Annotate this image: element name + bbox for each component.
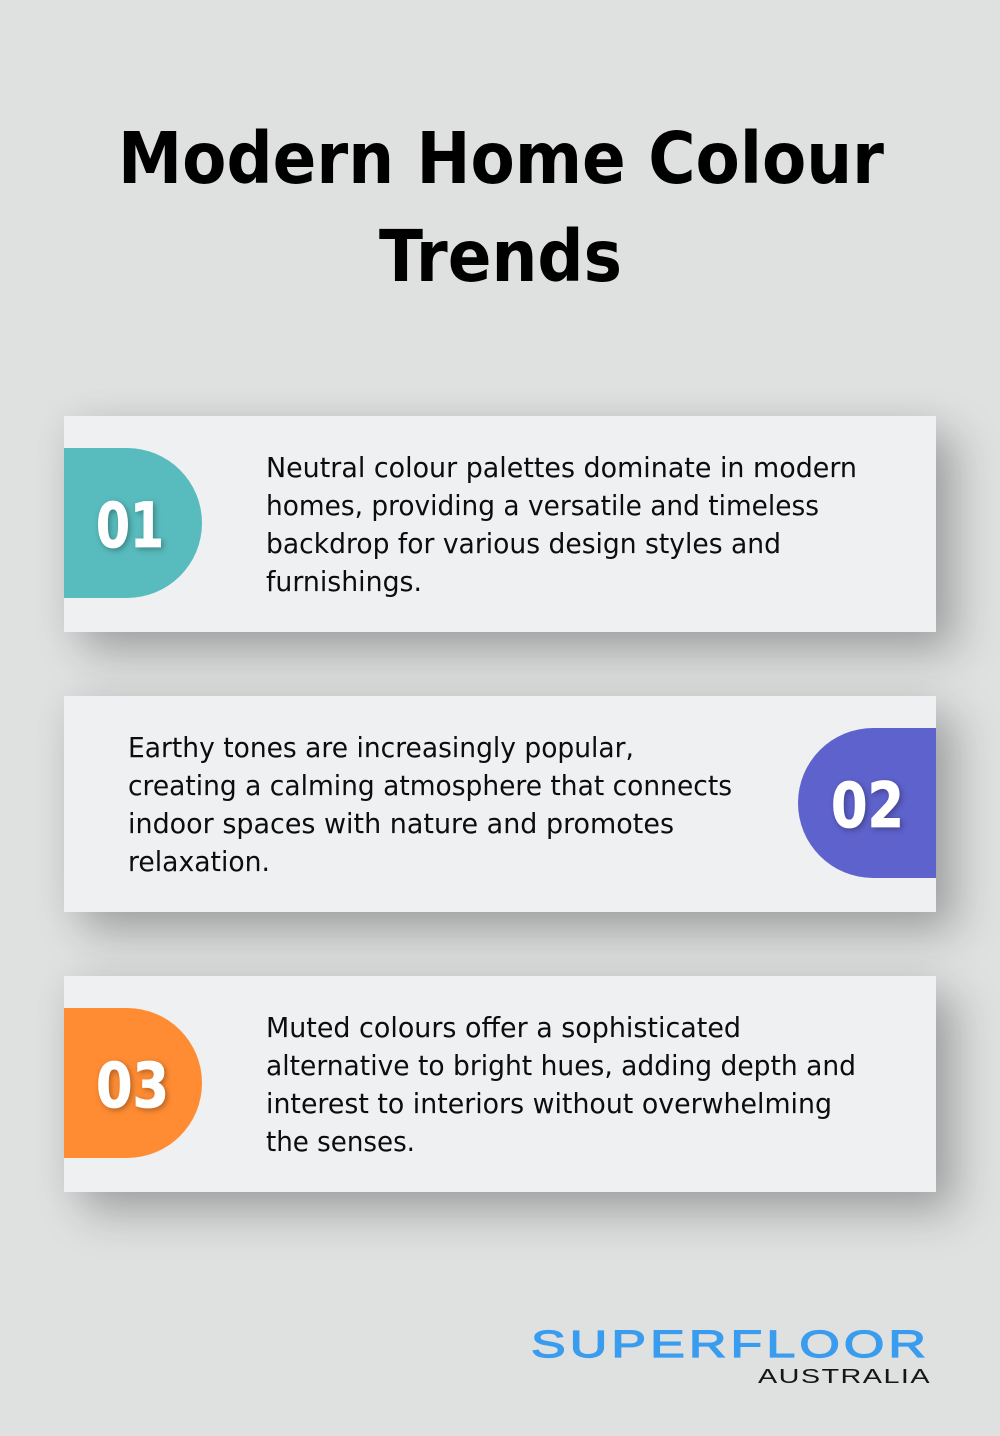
text block 03	[266, 1012, 856, 1158]
number 03: 03	[96, 1049, 169, 1122]
text block 01: furnishings.	[266, 566, 422, 598]
logo: Superfloor Australia: AUSTRALIA	[758, 1366, 931, 1388]
text block 03: the senses.	[266, 1126, 415, 1158]
number 02: 02	[831, 769, 904, 842]
text block 01: Neutral colour palettes dominate in modern	[266, 452, 857, 484]
text block 01: homes, providing a versatile and timeless	[266, 490, 819, 522]
badge 02	[798, 728, 936, 878]
logo: Superfloor Australia: SUPERFLOOR	[531, 1324, 930, 1366]
text block 02: relaxation.	[128, 846, 270, 878]
text block 02: Earthy tones are increasingly popular,	[128, 732, 634, 764]
text block 03: interest to interiors without overwhelming	[266, 1088, 832, 1120]
panel: card 03 muted colours	[64, 976, 936, 1192]
text block 01: backdrop for various design styles and	[266, 528, 781, 560]
text block 03: alternative to bright hues, adding depth and	[266, 1050, 856, 1082]
badge 01	[64, 448, 202, 598]
text block 02: indoor spaces with nature and promotes	[128, 808, 674, 840]
text block 02	[128, 732, 732, 878]
panel: card 01 neutral palettes	[64, 416, 936, 632]
text block 01	[266, 452, 857, 598]
panel: card 02 earthy tones	[64, 696, 936, 912]
title	[118, 117, 884, 298]
text block 02: creating a calming atmosphere that connects	[128, 770, 732, 802]
logo: Superfloor Australia	[531, 1324, 931, 1388]
title: Trends	[379, 215, 622, 298]
badge 03	[64, 1008, 202, 1158]
number 01: 01	[96, 489, 164, 562]
title: Modern Home Colour	[118, 117, 884, 200]
text block 03: Muted colours offer a sophisticated	[266, 1012, 741, 1044]
